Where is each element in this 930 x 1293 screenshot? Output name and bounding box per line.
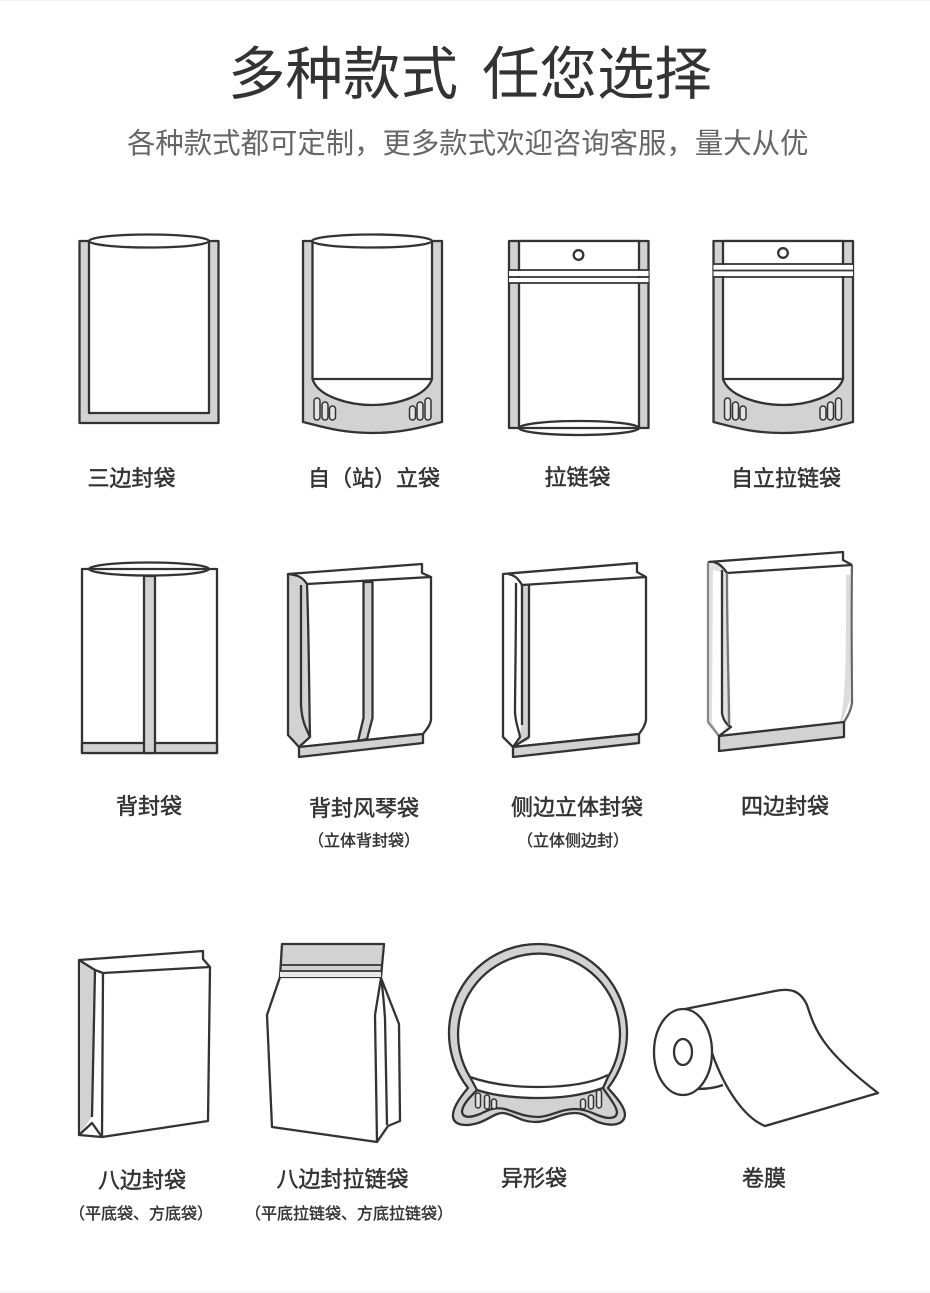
label: four-side seal: 四边封袋	[741, 794, 829, 819]
bag icon: stand-up pouch	[303, 234, 442, 433]
bag icon: stand-up zipper bag	[714, 241, 853, 433]
label: stand-up pouch: 自（站）立袋	[308, 466, 440, 491]
label: eight-side seal: 八边封袋	[98, 1168, 186, 1193]
bag icon: four-side seal	[708, 552, 852, 751]
sublabel: eight-side seal: （平底袋、方底袋）	[69, 1205, 213, 1223]
bag icon: side gusset seal	[503, 563, 646, 757]
label: film roll: 卷膜	[742, 1166, 786, 1191]
sublabel: eight-side zipper bag: （平底拉链袋、方底拉链袋）	[245, 1205, 453, 1223]
label: eight-side zipper bag: 八边封拉链袋	[276, 1167, 409, 1192]
label: back seal gusset: 背封风琴袋	[309, 796, 419, 821]
bag icon: shaped pouch	[449, 944, 627, 1125]
title	[228, 43, 712, 107]
bag icon: eight-side seal	[79, 951, 210, 1137]
label: side gusset seal: 侧边立体封袋	[511, 795, 643, 820]
title: 任您选择	[482, 43, 712, 107]
sublabel: side gusset seal: （立体侧边封）	[517, 832, 629, 850]
subtitle: 各种款式都可定制，更多款式欢迎咨询客服，量大从优	[127, 128, 808, 160]
bag icon: eight-side zipper bag	[267, 944, 400, 1142]
bag icon: zipper bag	[509, 241, 648, 435]
sublabel: back seal gusset: （立体背封袋）	[308, 832, 420, 850]
bag icon: back seal	[82, 562, 217, 753]
label: zipper bag: 拉链袋	[544, 465, 611, 490]
label: shaped pouch: 异形袋	[501, 1166, 567, 1191]
label: back seal: 背封袋	[116, 794, 182, 819]
label: three-side seal: 三边封袋	[87, 466, 176, 491]
icon: film roll	[654, 990, 878, 1126]
label: stand-up zipper bag: 自立拉链袋	[731, 466, 841, 491]
bag icon: back seal gusset	[288, 564, 431, 757]
title: 多种款式	[228, 43, 458, 107]
bag icon: three-side seal	[80, 234, 218, 423]
